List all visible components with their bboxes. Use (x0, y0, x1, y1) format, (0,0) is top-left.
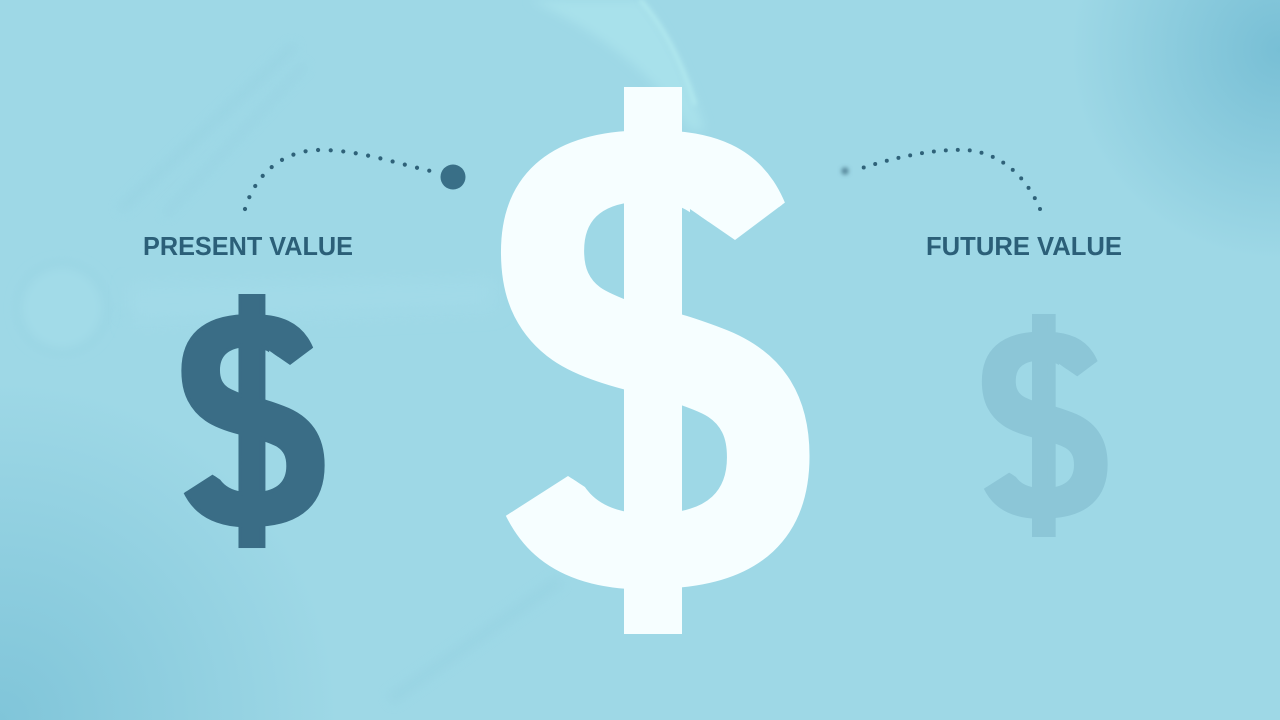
label group: present value (143, 150, 466, 261)
dot marker: future value (842, 168, 848, 174)
icon: dark dollar sign (181, 294, 325, 548)
heading: future value: FUTURE VALUE (926, 231, 1122, 261)
heading: present value: PRESENT VALUE (143, 231, 353, 261)
dotted arc: future value (862, 150, 1040, 209)
icon: faded dollar sign: $ (975, 271, 1110, 579)
icon: dark dollar sign: $ (173, 244, 327, 595)
icon: faded dollar sign (982, 314, 1108, 537)
dotted arc: present value (245, 150, 440, 209)
dot marker: present value (440, 164, 466, 190)
label group: future value (842, 150, 1122, 261)
